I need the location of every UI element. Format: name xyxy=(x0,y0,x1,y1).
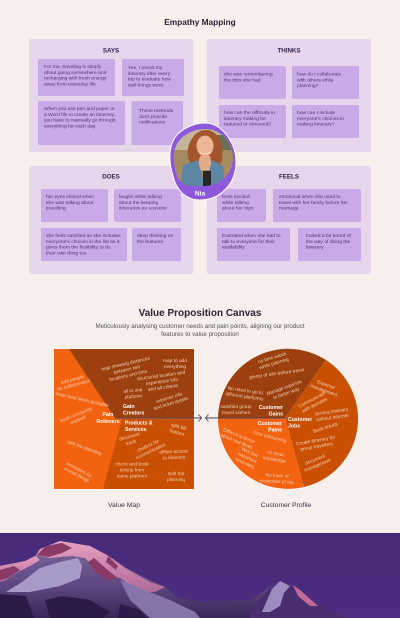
note: bored: itinerary xyxy=(306,245,324,251)
segment: customer pains xyxy=(218,418,304,489)
note: traveling: away from everyday life xyxy=(44,81,96,87)
label: pain relievers: Relievers xyxy=(96,419,120,425)
item texts: customer pains: about real deals xyxy=(220,433,254,451)
segment: customer jobs xyxy=(285,360,358,487)
label: pain relievers: Pain xyxy=(103,412,113,418)
note: excited: about her trips xyxy=(222,206,254,212)
note: emotional xyxy=(273,189,361,222)
item texts: customer jobs: without internet xyxy=(316,413,350,423)
item texts: pain relievers: local community xyxy=(59,406,94,424)
note: collaborate: how do I collaborate xyxy=(297,72,341,78)
item texts: customer pains: no local xyxy=(267,450,284,458)
item texts: products and services: split trip xyxy=(168,471,185,477)
item texts: customer jobs: with itsmates xyxy=(301,396,329,415)
note: pen and paper: you have to manually go through xyxy=(44,118,116,124)
note: laughs: itineraries as souvenir xyxy=(119,206,167,212)
item texts: customer pains: knowledge xyxy=(262,455,286,465)
note: eyes shined: travelling xyxy=(46,206,66,212)
note: collaborate: planning? xyxy=(297,83,319,89)
label: customer gains: Gains xyxy=(269,412,283,418)
note: traveling: For me, traveling is simply xyxy=(44,64,102,70)
note: difficulty: how can the difficulty in xyxy=(224,110,275,116)
note: deep thinking: the features xyxy=(137,239,164,245)
note: choices xyxy=(292,105,359,138)
panel: thinks xyxy=(207,39,371,152)
item texts: pain relievers: for collaboration xyxy=(57,378,91,393)
note: satisfied xyxy=(41,228,127,261)
item texts: customer gains: different platforms xyxy=(225,391,264,403)
note: choices: how can I include xyxy=(297,110,335,116)
item texts: customer gains: no time waste xyxy=(257,351,288,365)
item texts: products and services: feature xyxy=(169,428,185,438)
item texts: customer jobs: Expense xyxy=(316,379,336,391)
note: revisit itinerary: trip to evaluate how xyxy=(128,77,171,83)
item texts: gain creators xyxy=(101,355,190,412)
note: satisfied: their own thing too xyxy=(46,250,87,256)
item texts: gain creators: map showing distances xyxy=(101,355,151,373)
note: satisfied: she feels satisfied as she includes xyxy=(46,233,121,239)
item texts: products and services: chatbox for xyxy=(136,438,161,454)
note: deep thinking xyxy=(132,228,181,261)
note: eyes shined xyxy=(41,189,108,222)
sunlit ridges xyxy=(0,541,165,592)
item texts: gain creators: between two xyxy=(113,364,141,376)
item texts: customer pains: reminders xyxy=(234,456,256,471)
note: traveling xyxy=(38,59,115,96)
note: excited xyxy=(217,189,266,222)
heading: does: DOES xyxy=(102,174,120,180)
label: customer jobs: Customer xyxy=(288,417,312,423)
note: frustrated: availability xyxy=(222,245,245,251)
note: deep thinking: deep thinking on xyxy=(137,233,173,239)
item texts: gain creators: map to add xyxy=(163,358,187,364)
item texts: customer gains: in better way xyxy=(273,386,301,401)
item texts: products and services: document xyxy=(119,431,141,443)
item texts: products and services: planning xyxy=(167,477,185,483)
item texts: customer gains: satisfied group xyxy=(220,404,252,410)
note: bored: the way of doing the xyxy=(306,239,350,245)
item texts: customer jobs: Book tickets xyxy=(312,421,339,435)
item texts: gain creators: and ticket details xyxy=(153,396,190,412)
segment: customer gains xyxy=(218,349,326,418)
item texts: customer pains: Difficult to know xyxy=(222,427,256,445)
item texts: customer pains xyxy=(220,427,294,486)
note: revisit itinerary: itinerary after every xyxy=(128,71,171,77)
panel: says xyxy=(29,39,193,152)
item texts: products and services: to itinerary xyxy=(163,454,186,462)
note: excited: while talking xyxy=(222,200,249,206)
note: collaborate: with others while xyxy=(297,77,334,83)
item texts: products and services: split bill xyxy=(170,422,187,432)
label: customer pains: Customer xyxy=(258,421,282,427)
note: revisit itinerary xyxy=(122,59,184,96)
label: customer pains: Pains xyxy=(268,428,282,434)
note: difficulty: reduced or removed? xyxy=(224,122,271,128)
item texts: gain creators: structured location and xyxy=(137,370,186,382)
label: products and services: Services xyxy=(125,427,146,433)
item texts: products and services: communication xyxy=(135,442,167,461)
note: difficulty xyxy=(219,105,286,138)
item texts: pain relievers: reminders for xyxy=(65,461,93,480)
note: bored xyxy=(298,228,361,261)
note: difficulty: itinerary making be xyxy=(224,116,266,122)
note: traveling: about going somewhere and xyxy=(44,70,107,76)
photo of Nia xyxy=(174,129,233,186)
note: notifications: These methods xyxy=(139,108,174,114)
subtitle: features to value proposition xyxy=(161,331,239,338)
segment: products and services xyxy=(103,419,194,489)
item texts: customer gains: No need to go to xyxy=(227,386,264,397)
label: gain creators: Gain xyxy=(123,404,135,410)
segment: gain creators xyxy=(69,349,194,418)
shadow crags xyxy=(0,543,118,580)
item texts: gain creators: all in one xyxy=(123,387,143,395)
note: notifications: notifications xyxy=(139,120,166,126)
note: laughs: laughs while talking xyxy=(119,194,162,200)
item texts: gain creators: platform xyxy=(125,393,142,401)
item texts: customer jobs: Communicate xyxy=(298,390,327,410)
item texts: gain creators: everything xyxy=(164,364,186,370)
item texts: customer jobs: Create itinerary for xyxy=(296,435,336,447)
note: satisfied: everyone's choices in the list as it xyxy=(46,239,120,245)
panel: feels xyxy=(207,166,371,274)
item texts: products and services xyxy=(115,422,189,483)
item texts: products and services: offline access xyxy=(159,448,189,456)
item texts: gain creators: expense info xyxy=(156,391,184,405)
item texts: customer jobs: management xyxy=(303,457,332,474)
note: notifications: don't provide xyxy=(139,114,167,120)
persona: Nia xyxy=(170,123,236,200)
item texts: customer jobs: access itinerary xyxy=(315,407,349,417)
item texts: customer gains: Manage expense xyxy=(266,379,303,397)
note: frustrated: talk to everyone for their xyxy=(222,239,275,245)
item texts: pain relievers: support xyxy=(70,414,87,426)
note: pen and paper: a Word file to create an itinerary, xyxy=(44,112,115,118)
item texts: products and services: vault xyxy=(125,438,137,447)
heading: thinks: THINKS xyxy=(277,48,301,54)
note: choices: everyone's choices in xyxy=(297,116,344,122)
item texts: gain creators: locations and time xyxy=(109,369,148,383)
note: bored: looked a bit bored of xyxy=(306,233,351,239)
note: eyes shined: she was talking about xyxy=(46,200,94,206)
note: pen and paper: When you use pen and paper or xyxy=(44,106,115,112)
heading: says: SAYS xyxy=(103,48,119,54)
item texts: customer jobs: management xyxy=(309,383,338,399)
item texts: customer jobs xyxy=(296,378,350,474)
note: remembering trips xyxy=(219,66,286,99)
footer mountain image xyxy=(0,532,400,618)
heading: feels: FEELS xyxy=(279,174,299,180)
subtitle: Meticulously analysing customer needs and pain points, aligning our product xyxy=(95,323,305,330)
right peak xyxy=(250,581,346,618)
heading: Value Proposition Canvas: Value Proposition Canvas xyxy=(139,308,262,319)
caption: value map: Value Map xyxy=(108,502,140,509)
item texts: customer gains: while planning xyxy=(259,356,290,371)
label: customer jobs: Jobs xyxy=(288,424,300,430)
note: traveling: recharging with fresh energy xyxy=(44,76,107,82)
note: frustrated xyxy=(217,228,290,261)
lavender snowfield xyxy=(6,558,82,592)
item texts: customer pains: Time consuming xyxy=(252,430,287,445)
note: pen and paper: everything for each day. xyxy=(44,123,96,129)
arrow: value map to customer profile xyxy=(115,414,285,422)
note: collaborate xyxy=(292,66,359,99)
note: eyes shined: her eyes shined when xyxy=(46,194,94,200)
item texts: customer gains: travel wishes xyxy=(222,410,250,416)
item texts: pain relievers: know best deals available xyxy=(55,391,110,409)
note: laughs xyxy=(114,189,181,222)
note: emotional: travel with her family before her xyxy=(279,200,348,206)
item texts: customer pains: expenses of trip xyxy=(260,478,294,486)
item texts: gain creators: and all criteria xyxy=(148,383,178,393)
note: excited: feels excited xyxy=(222,194,250,200)
name label: Nia xyxy=(195,190,205,198)
label: customer gains: Customer xyxy=(259,405,283,411)
note: choices: making itinerary? xyxy=(297,122,335,128)
item texts: customer jobs: group travellers xyxy=(300,441,334,453)
item texts: products and services: same platform xyxy=(117,474,147,480)
note: remembering trips: she was remembering xyxy=(224,72,273,78)
item texts: customer pains: Very few xyxy=(240,446,260,459)
label: products and services: Products & xyxy=(125,420,153,426)
item texts: pain relievers: crucial things xyxy=(63,466,91,485)
item texts: customer gains xyxy=(220,351,305,416)
item texts: pain relievers: add people xyxy=(60,374,85,386)
item texts: products and services: check and book xyxy=(115,462,149,468)
note: revisit itinerary: Yes, I revisit my xyxy=(128,65,163,71)
item texts: pain relievers xyxy=(55,373,110,485)
note: pen and paper xyxy=(38,101,125,145)
item texts: products and services: tickets from xyxy=(120,468,144,474)
chart: value map square xyxy=(54,348,194,490)
note: notifications xyxy=(132,101,183,145)
note: remembering trips: the trips she had xyxy=(224,77,261,83)
item texts: pain relievers: split trip planning xyxy=(66,439,102,457)
item texts: customer pains: important xyxy=(237,451,258,465)
note: laughs: about the keeping xyxy=(119,200,159,206)
note: revisit itinerary: well things went. xyxy=(128,82,164,88)
label: gain creators: Creators xyxy=(123,410,144,416)
item texts: customer pains: No track of xyxy=(265,472,290,480)
caption: customer profile: Customer Profile xyxy=(261,502,312,509)
note: satisfied: gives them the flexibility to do xyxy=(46,245,111,251)
dark foothills xyxy=(0,594,146,618)
item texts: customer jobs: document xyxy=(304,453,327,467)
mountain range xyxy=(0,541,346,618)
panel: does xyxy=(29,166,193,274)
chart: customer profile circle xyxy=(218,348,358,490)
item texts: customer gains: plenty of info before travel xyxy=(249,367,305,381)
note: emotional: marriage xyxy=(279,206,299,212)
title: Empathy Mapping: Empathy Mapping xyxy=(164,17,236,27)
note: emotional: emotional when she used to xyxy=(279,194,341,200)
item texts: gain creators: experience info xyxy=(145,377,179,387)
note: frustrated: frustrated when she had to xyxy=(222,233,281,239)
